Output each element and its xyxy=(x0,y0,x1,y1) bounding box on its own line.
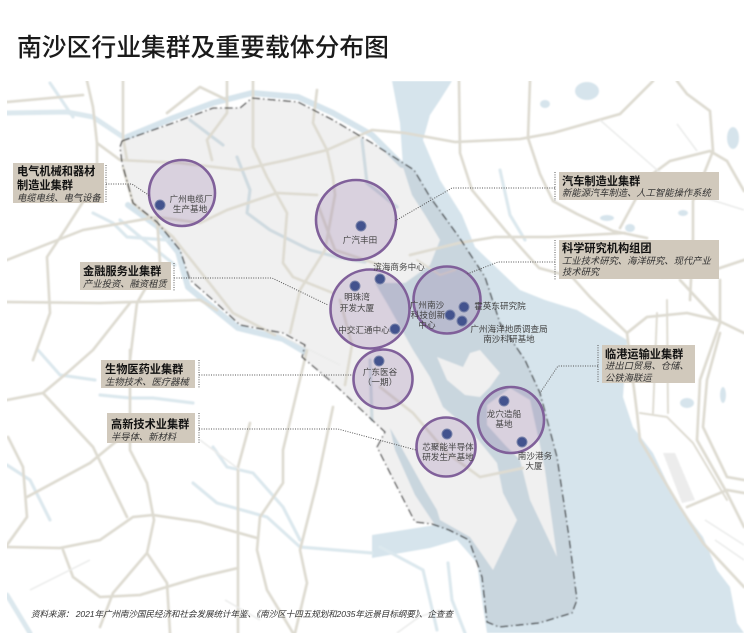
title: 南沙区行业集群及重要载体分布图 xyxy=(17,34,389,62)
callout: port logistics cluster xyxy=(602,345,695,383)
location labels: （一期） xyxy=(363,377,397,387)
location labels: 科技创新 xyxy=(411,309,446,320)
location labels: 滨海商务中心 xyxy=(373,261,425,272)
location labels: 中交汇通中心 xyxy=(338,324,390,335)
location labels xyxy=(170,193,553,471)
location labels: 广州南沙 xyxy=(410,299,445,310)
district shaded area xyxy=(120,98,577,627)
callout: financial services cluster: 金融服务业集群 xyxy=(83,264,161,278)
callout: electrical machinery cluster: 电缆电线、电气设备 xyxy=(17,193,102,203)
location labels: 开发大厦 xyxy=(340,302,375,313)
location labels: 龙穴造船 xyxy=(487,408,522,419)
location labels: 广州电缆厂 xyxy=(170,193,213,204)
callout: research institutions xyxy=(559,240,719,279)
callout: electrical machinery cluster xyxy=(13,163,104,203)
callout: financial services cluster xyxy=(80,262,171,290)
leader lines xyxy=(106,165,598,450)
callout: port logistics cluster: 进出口贸易、仓储、 xyxy=(605,361,689,371)
callout: automotive cluster: 新能源汽车制造、人工智能操作系统 xyxy=(562,188,712,198)
location labels: 广东医谷 xyxy=(363,366,398,377)
source note: 资料来源： 2021年广州南沙国民经济和社会发展统计年鉴、《南沙区十四五规划和2035年远景目标纲要》、企查查 xyxy=(31,609,454,619)
location labels: 广州海洋地质调查局 xyxy=(470,323,548,334)
callout: research institutions: 技术研究 xyxy=(562,267,601,277)
ponds and airport area xyxy=(540,82,739,503)
district boundary xyxy=(120,98,577,627)
callout: high-tech cluster: 半导体、新材料 xyxy=(111,432,177,442)
callout: biomedicine cluster xyxy=(101,360,195,388)
rivers xyxy=(7,83,525,633)
location dots xyxy=(155,200,527,447)
callout: electrical machinery cluster: 制造业集群 xyxy=(17,178,73,192)
location labels: 南沙港务 xyxy=(518,450,553,461)
callout: high-tech cluster: 高新技术业集群 xyxy=(111,417,189,431)
callout: automotive cluster xyxy=(559,172,719,200)
callout: financial services cluster: 产业投资、融资租赁 xyxy=(83,279,168,289)
location labels: 大厦 xyxy=(525,460,543,471)
callout: port logistics cluster: 临港运输业集群 xyxy=(605,347,683,361)
callout: port logistics cluster: 公铁海联运 xyxy=(605,373,653,383)
location labels: 中心 xyxy=(418,319,436,330)
location labels: 霍英东研究院 xyxy=(474,300,526,311)
callout: biomedicine cluster: 生物技术、医疗器械 xyxy=(105,377,190,387)
callout: automotive cluster: 汽车制造业集群 xyxy=(562,174,640,188)
cluster circles xyxy=(149,160,544,476)
water: estuary and sea xyxy=(372,81,744,633)
location labels: 广汽丰田 xyxy=(343,234,377,245)
location labels: 芯聚能半导体 xyxy=(422,441,474,452)
land: southern reclaimed areas xyxy=(414,350,557,570)
callout: research institutions: 科学研究机构组团 xyxy=(562,241,652,255)
location labels: 生产基地 xyxy=(173,203,208,214)
callout: biomedicine cluster: 生物医药业集群 xyxy=(105,362,183,376)
callout: high-tech cluster xyxy=(107,413,195,443)
callout: research institutions: 工业技术研究、海洋研究、现代产业 xyxy=(562,256,711,266)
location labels: 南沙科研基地 xyxy=(483,333,535,344)
location labels: 明珠湾 xyxy=(344,291,370,302)
location labels: 基地 xyxy=(495,418,513,429)
location labels: 研发生产基地 xyxy=(422,451,474,462)
callout: electrical machinery cluster: 电气机械和器材 xyxy=(17,164,95,178)
